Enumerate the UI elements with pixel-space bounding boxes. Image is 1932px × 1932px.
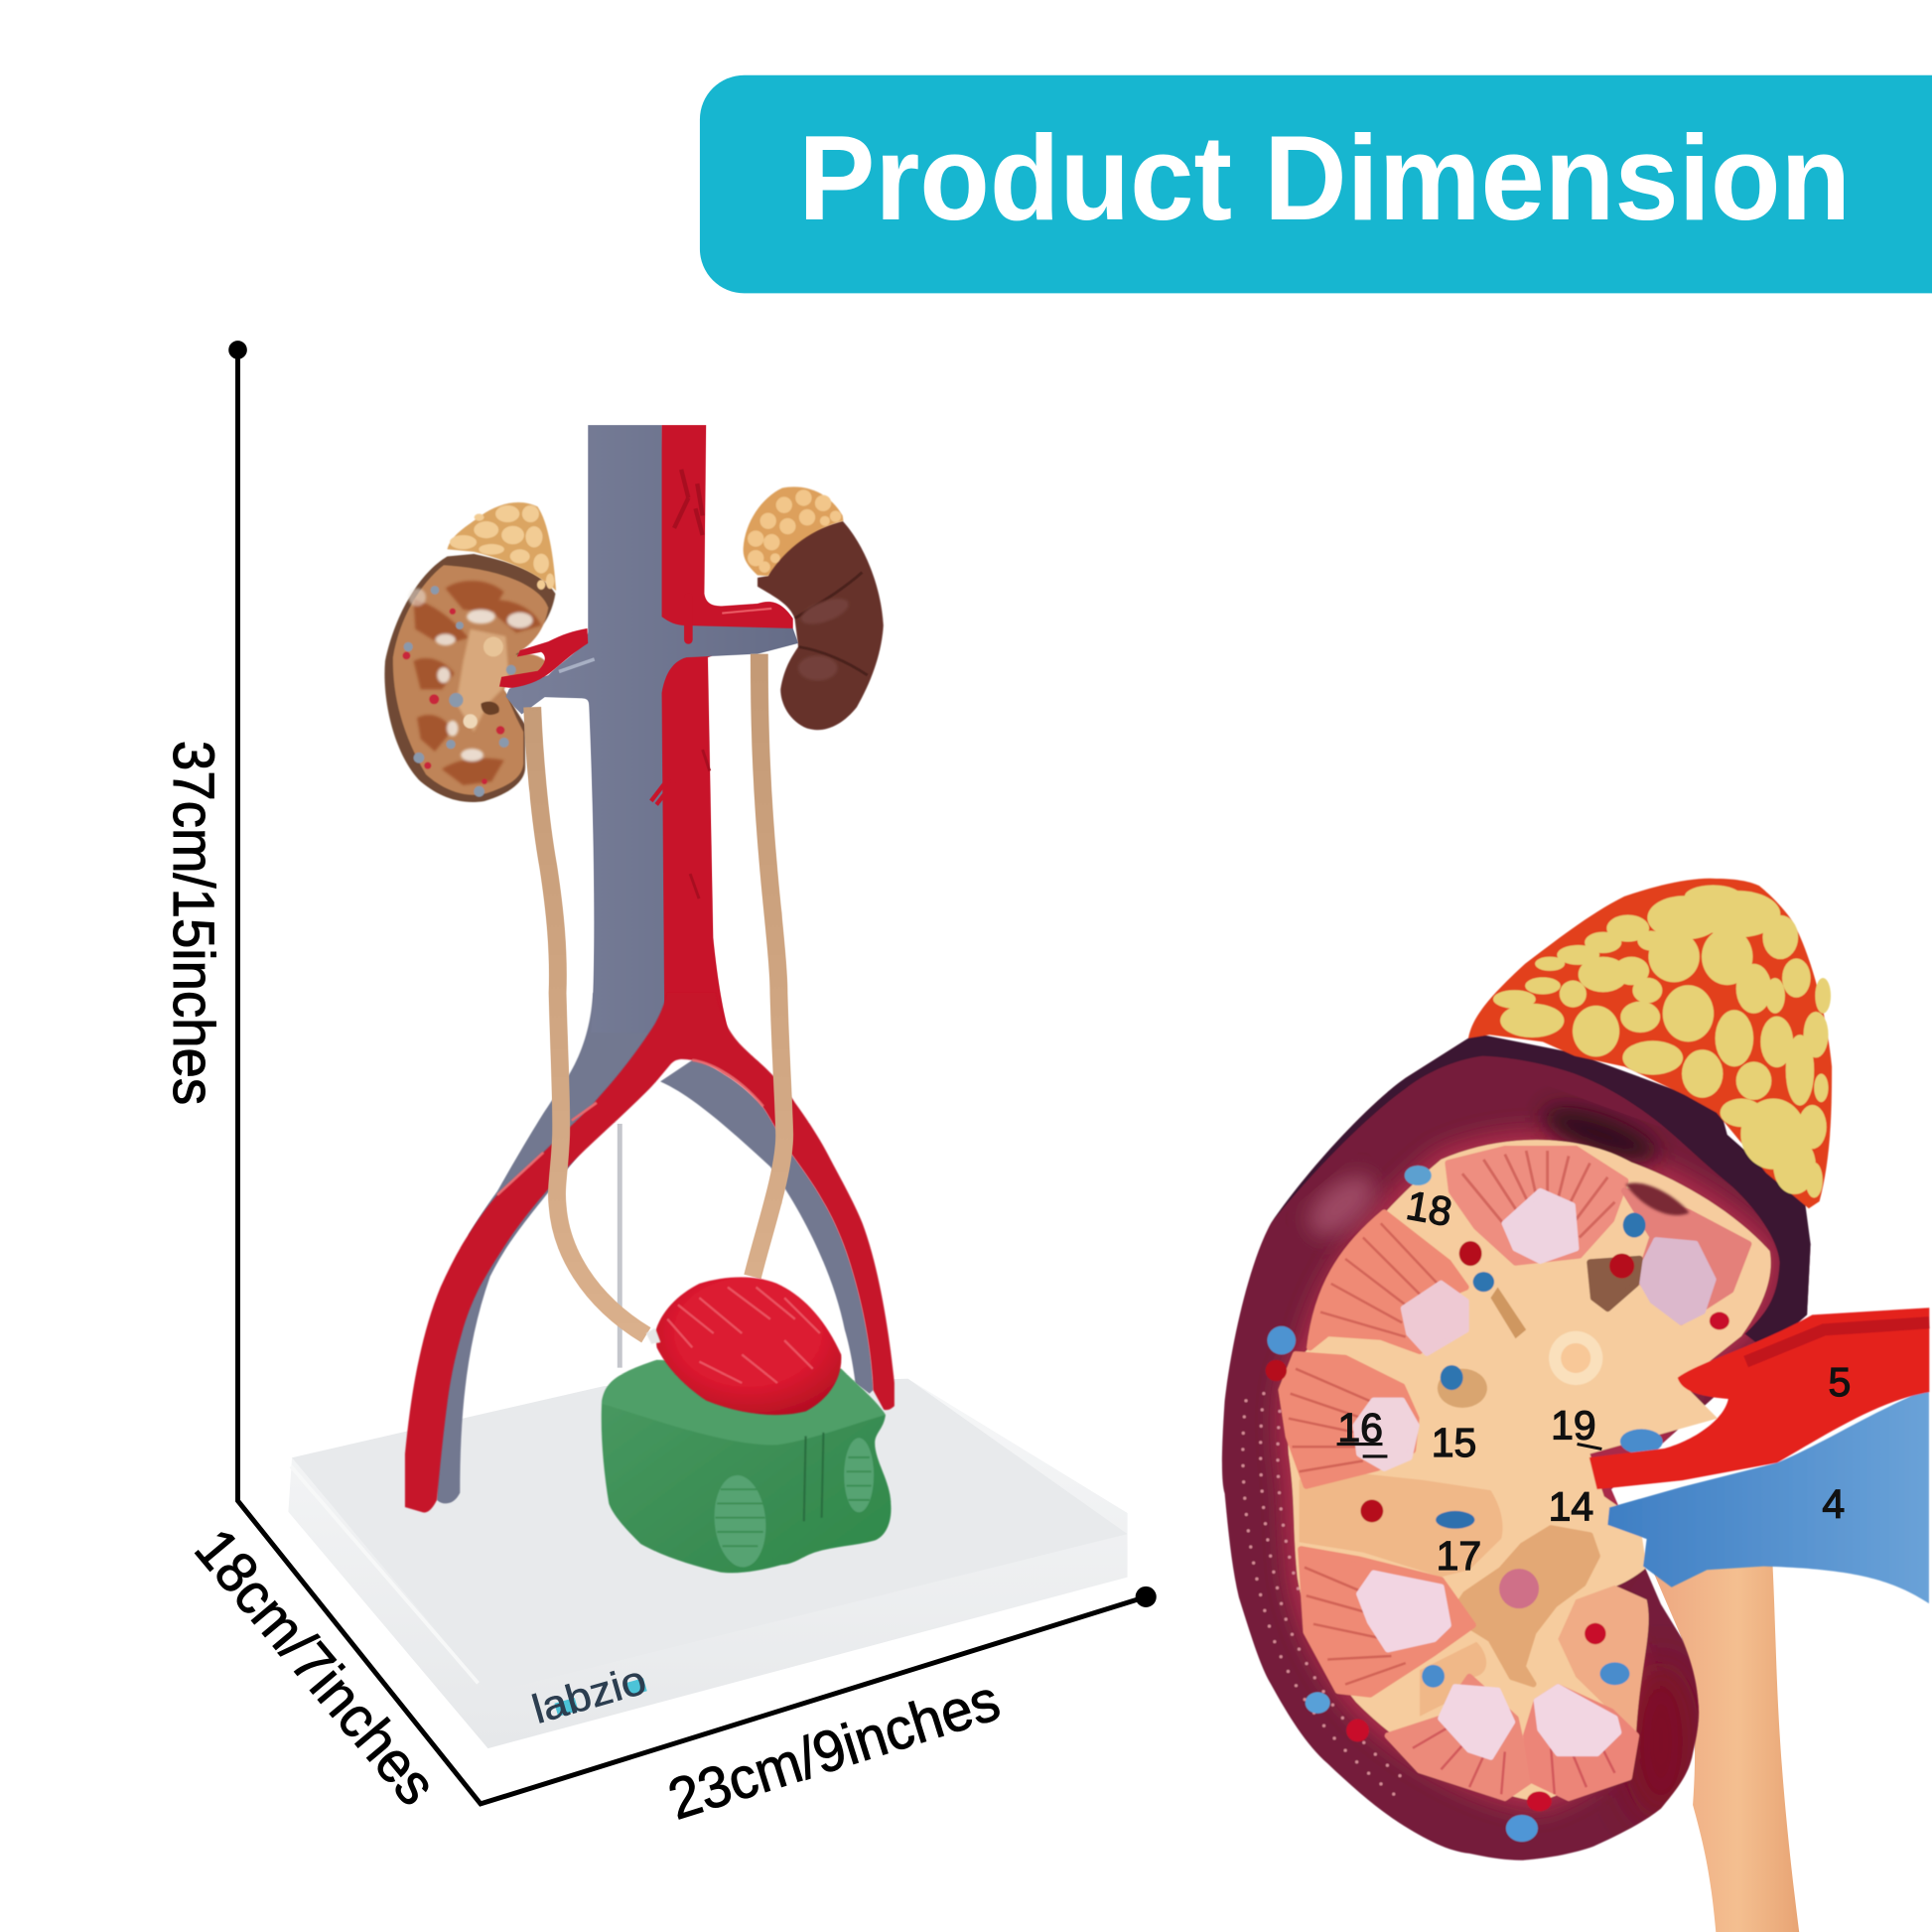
green prostate block (602, 1360, 891, 1573)
dimension lines (228, 341, 1157, 1804)
outer kidney (1222, 1035, 1811, 1861)
ureters (532, 654, 784, 1335)
grey iliac veins (437, 993, 873, 1503)
pyramid upper right (1589, 1183, 1748, 1322)
right adrenal gland (744, 486, 843, 576)
pyramid left (1282, 1354, 1416, 1486)
papilla circles (1499, 1331, 1602, 1608)
left kidney section (384, 554, 555, 802)
cortex shading (1288, 1096, 1771, 1823)
width label: 23cm/9inches (661, 1668, 1007, 1832)
hand-written labels: 19 (1551, 1403, 1596, 1449)
vena cava with renal veins (505, 425, 798, 1033)
hand-written labels: 14 (1549, 1483, 1593, 1529)
interior pelvis (1288, 1140, 1771, 1801)
renal vein (1607, 1388, 1929, 1603)
hand-written labels: 4 (1822, 1481, 1845, 1527)
hand-written labels: 17 (1437, 1533, 1481, 1579)
kidney drawing (1222, 879, 1929, 1861)
hand-written labels: 18 (1403, 1182, 1455, 1235)
depth label: 18cm/7inches (183, 1517, 449, 1817)
banner title: Product Dimension (798, 110, 1851, 245)
white base (288, 1379, 1128, 1748)
left renal artery (499, 628, 588, 688)
pyramid lower left (1301, 1549, 1473, 1695)
cortex speckles (1243, 1394, 1406, 1798)
hand-written labels (1337, 1182, 1851, 1579)
renal artery (1589, 1308, 1929, 1489)
lower column tissue (1300, 1473, 1503, 1577)
vessel dots (404, 586, 516, 797)
calyx shadows (1438, 1288, 1526, 1408)
urinary system model (288, 425, 1128, 1748)
blue and red vessel dots (1266, 1166, 1729, 1842)
ureter (1647, 1557, 1799, 1932)
height label: 37cm/15inches (161, 741, 225, 1105)
support rod (618, 1124, 621, 1368)
aorta bifurcation and iliac arteries (405, 993, 895, 1513)
dark capsule (1271, 1035, 1811, 1350)
header banner (700, 75, 1932, 293)
hand-written labels: 15 (1432, 1420, 1476, 1465)
section highlights (408, 589, 533, 761)
medullary fans (408, 581, 541, 785)
right kidney (758, 521, 884, 730)
aorta small branches (651, 597, 710, 898)
adrenal gland (1468, 879, 1832, 1208)
pyramid upper left (1310, 1213, 1465, 1353)
pyramid top (1449, 1149, 1625, 1263)
left adrenal gland (447, 502, 556, 591)
hand-written labels: 5 (1829, 1359, 1851, 1405)
aorta upper (651, 425, 793, 1033)
enlarged kidney cross-section (1222, 879, 1929, 1932)
bladder (646, 1277, 841, 1415)
logo: labzio (527, 1657, 651, 1732)
pyramids bottom (1388, 1677, 1636, 1798)
hand-written labels: 16 (1337, 1405, 1383, 1450)
